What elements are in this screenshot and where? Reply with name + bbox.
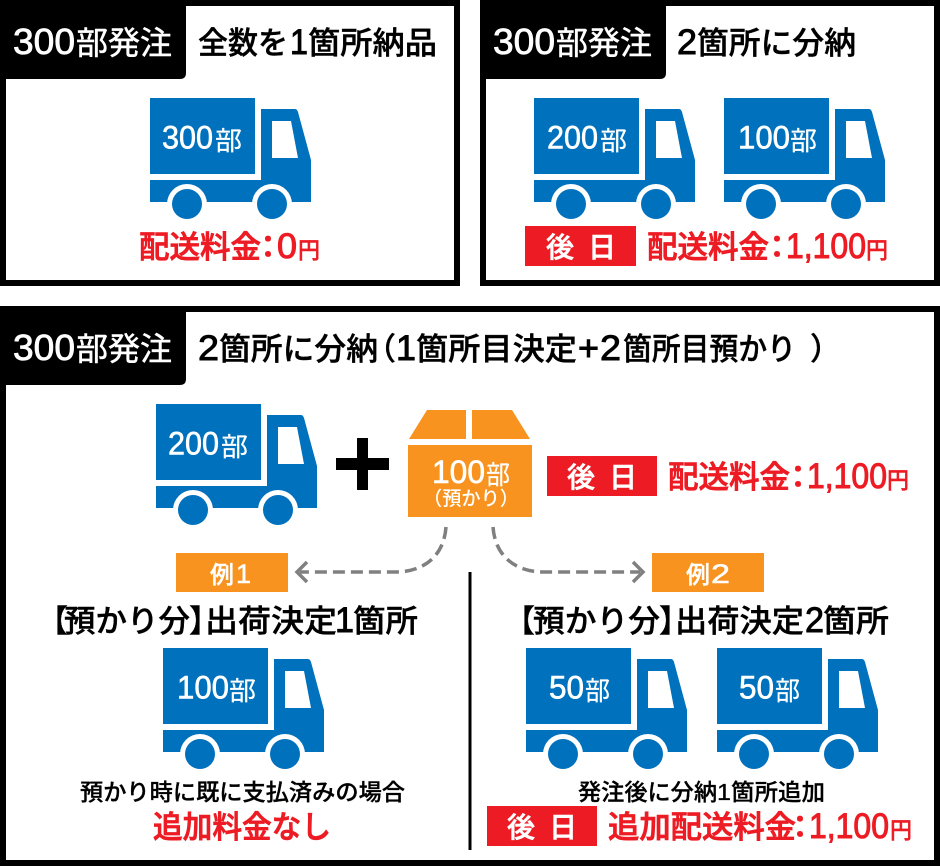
shipping fee: 0 yen: 円 [298,237,320,263]
icon: truck 50 first: 部 [585,676,610,706]
badge: example 2 [652,553,764,592]
icon: truck 50 first [526,648,687,774]
tab: 300 copies ordered [0,0,186,79]
icon: truck 50 first: 50 [549,670,584,706]
badge: later date: 後日 [546,232,616,263]
heading: split with storage: 1 [396,329,416,368]
heading: two locations: 箇所 [823,604,889,639]
heading: two locations: 】 [659,604,690,639]
tab: 300 copies ordered: 部発注 [76,331,172,367]
note: one location added: 発注後に分納 [578,779,717,805]
heading: one location: 出荷決定 [205,604,337,639]
shipping fee: 1,100 yen: 配送料金 [668,460,790,495]
icon: truck 50 second [717,648,878,774]
panel: split delivery with storage [0,306,937,863]
heading: split with storage: 2 [600,329,621,368]
additional fee: 1,100 yen: 円 [890,817,912,843]
additional fee: 1,100 yen: 1,100 [809,807,889,846]
badge: example 2: 例 [686,562,710,589]
heading: split into two: 2 [677,23,697,62]
heading: two locations: 【 [504,604,535,639]
icon: truck 200: 200 [168,426,219,462]
shipping fee: 1,100 yen: 1,100 [807,457,887,496]
arrow: to example 2 [493,527,643,582]
shipping fee: 1,100 yen: ： [782,460,814,495]
icon: truck 200: 200 [547,120,598,156]
icon: box 100 stored: 部 [486,460,510,490]
badge: example 1: 例 [210,562,234,589]
shipping fee: 1,100 yen: 円 [866,237,888,263]
icon: truck 300 [150,98,311,224]
icon: plus [336,438,389,490]
heading: split with storage: （ [365,332,396,367]
additional fee: 1,100 yen: 追加配送料金 [608,810,796,845]
icon: truck 100: 100 [738,120,790,156]
badge: later date [525,226,636,266]
tab: 300 copies ordered: 部発注 [76,25,172,61]
icon: box 100 stored: （預かり） [423,488,519,510]
heading: split with storage: 箇所目決定 [416,332,577,367]
icon: truck 200: 部 [600,126,627,156]
column: example 2 [487,601,912,846]
shipping fee: 1,100 yen [668,457,909,496]
tab: 300 copies ordered: 部発注 [556,25,652,61]
icon: truck 200: 部 [221,432,248,462]
note: already paid: 預かり時に既に支払済みの場合 [80,779,405,805]
icon: truck 50 second: 部 [775,676,800,706]
badge: later date [487,806,597,846]
heading: split with storage [198,329,841,368]
tab: 300 copies ordered [480,0,666,79]
shipping fee: 1,100 yen [647,227,888,266]
heading: two locations: 預かり分 [533,604,660,639]
heading: one location [37,601,418,640]
icon: truck 200 [534,98,695,224]
badge: later date [547,456,657,496]
note: one location added [578,779,825,805]
additional fee: 1,100 yen [608,807,912,846]
tab: 300 copies ordered: 300 [13,327,75,368]
heading: split into two: 箇所に分納 [697,26,856,61]
panel: split delivery to two locations [480,0,937,283]
icon: truck 100: 部 [229,676,256,706]
result: no additional fee: 追加料金なし [153,810,331,845]
shipping fee: 1,100 yen: 円 [887,467,909,493]
icon: truck 200 [156,404,317,530]
arrow: to example 1 [297,527,446,582]
heading: one location: 預かり分 [64,604,190,639]
panel: full delivery to one location [0,0,457,283]
note: one location added: 1 [717,779,731,805]
icon: truck 300: 部 [215,126,242,156]
heading: two locations [504,601,889,640]
note: one location added: 箇所追加 [731,779,825,805]
heading: split with storage: ） [810,332,841,367]
shipping fee: 0 yen: 0 [277,227,297,266]
heading: split with storage: 箇所目預かり [623,332,796,367]
shipping fee: 1,100 yen: 1,100 [786,227,866,266]
column: example 1 [37,601,418,845]
heading: two locations: 出荷決定 [675,604,804,639]
icon: box 100 stored: 100 [432,454,485,490]
badge: later date: 後日 [507,812,577,843]
icon: truck 100 [163,648,324,774]
icon: truck 50 second: 50 [739,670,774,706]
heading: one location: 箇所 [353,604,418,639]
heading: split with storage: 2 [198,329,219,368]
shipping fee: 1,100 yen: 配送料金 [647,230,769,265]
shipping fee: 0 yen [139,227,320,266]
icon: truck 100: 部 [790,126,817,156]
heading: split with storage: 箇所に分納 [219,332,378,367]
heading: full delivery: 箇所納品 [308,26,437,61]
heading: one location: 【 [37,604,68,639]
heading: split with storage: + [578,329,599,368]
heading: full delivery: 1 [290,23,308,62]
heading: two locations: 2 [805,601,824,640]
icon: truck 300: 300 [162,120,213,156]
badge: later date: 後日 [567,462,637,493]
shipping fee: 0 yen: 配送料金 [139,230,261,265]
badge: example 1: 1 [236,559,251,589]
icon: box 100 stored [408,410,532,517]
additional fee: 1,100 yen: ： [784,810,816,845]
heading: full delivery: 全数を [198,26,288,61]
tab: 300 copies ordered: 300 [493,21,555,62]
badge: example 2: 2 [711,559,730,589]
heading: one location: 】 [189,604,220,639]
shipping fee: 0 yen: ： [252,230,284,265]
tab: 300 copies ordered [0,306,186,385]
shipping fee: 1,100 yen: ： [762,230,792,265]
icon: truck 100: 100 [177,670,229,706]
badge: example 1 [176,553,288,592]
icon: truck 100 [724,98,885,224]
heading: one location: 1 [335,601,354,640]
tab: 300 copies ordered: 300 [13,21,75,62]
heading: full delivery [198,23,437,62]
